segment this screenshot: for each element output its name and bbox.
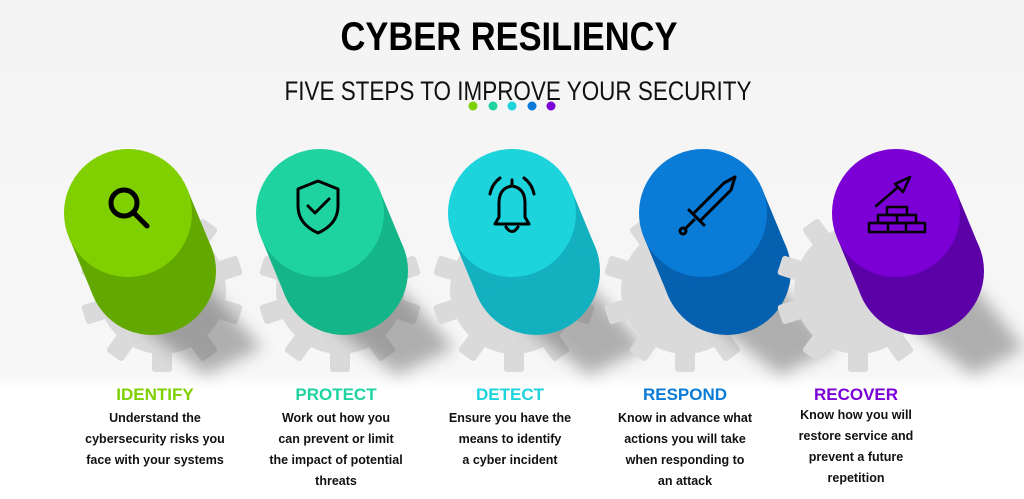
label: identify: Understand the xyxy=(109,411,201,425)
label: detect: DETECT xyxy=(476,385,545,404)
icon: shield xyxy=(298,181,338,233)
label: detect xyxy=(449,385,571,467)
step: protect xyxy=(256,149,454,375)
title: CYBER RESILIENCY xyxy=(340,15,678,59)
label: recover: Know how you will xyxy=(800,408,912,422)
label: respond: actions you will take xyxy=(624,432,746,446)
label: protect: the impact of potential xyxy=(269,453,403,467)
icon: bricks and trowel xyxy=(869,177,925,232)
label: recover: prevent a future xyxy=(809,450,903,464)
label: detect: a cyber incident xyxy=(462,453,558,467)
label: protect: threats xyxy=(315,474,357,488)
icon: bell xyxy=(490,178,534,232)
label: recover: restore service and xyxy=(799,429,913,443)
step: detect xyxy=(433,149,646,375)
step: recover xyxy=(777,149,1024,375)
label: detect: Ensure you have the xyxy=(449,411,571,425)
label: identify: face with your systems xyxy=(86,453,224,467)
label: respond xyxy=(618,385,753,488)
label: identify xyxy=(85,385,225,467)
label: protect xyxy=(269,385,403,488)
subtitle: FIVE STEPS TO IMPROVE YOUR SECURITY xyxy=(284,76,752,106)
label: protect: Work out how you xyxy=(282,411,390,425)
icon: magnifier xyxy=(111,190,147,226)
step: respond xyxy=(604,149,837,375)
label: recover: RECOVER xyxy=(814,385,898,404)
label: identify: cybersecurity risks you xyxy=(85,432,225,446)
label: recover: repetition xyxy=(828,471,884,485)
label: recover xyxy=(799,385,913,485)
label: protect: PROTECT xyxy=(295,385,377,404)
label: protect: can prevent or limit xyxy=(278,432,394,446)
step: identify xyxy=(64,149,262,375)
icon: sword xyxy=(680,177,735,234)
label: respond: an attack xyxy=(658,474,712,488)
label: respond: Know in advance what xyxy=(618,411,753,425)
label: respond: RESPOND xyxy=(643,385,727,404)
label: identify: IDENTIFY xyxy=(116,385,194,404)
label: respond: when responding to xyxy=(625,453,745,467)
color dots xyxy=(468,102,556,110)
label: detect: means to identify xyxy=(459,432,561,446)
